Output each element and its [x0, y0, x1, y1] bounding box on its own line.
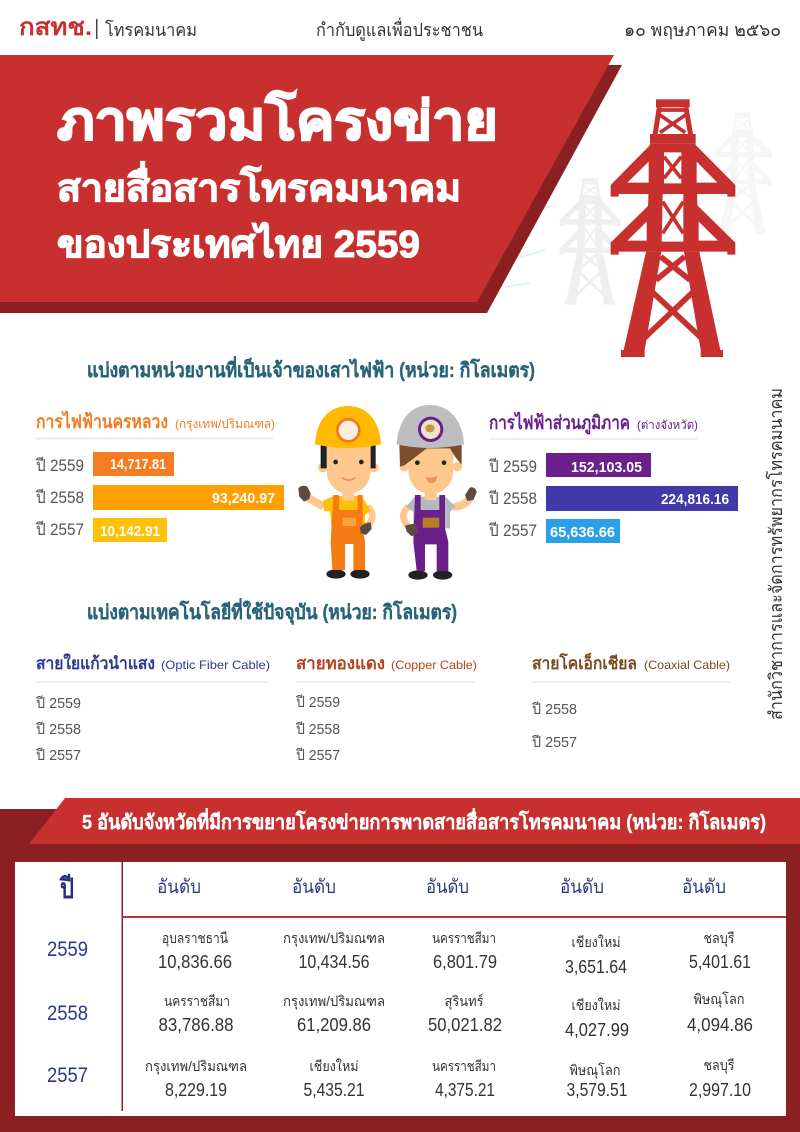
table: 2557: [47, 1064, 88, 1087]
panel: optic fiber: ปี 2558: [35, 721, 81, 738]
table: อุบลราชธานี: [162, 930, 228, 947]
bar chart: MEA: [93, 452, 284, 542]
table: สุรินทร์: [444, 993, 484, 1010]
panel: coaxial: [531, 651, 730, 751]
icon: background pylon left: [560, 178, 621, 305]
table: อันดับ: [426, 877, 469, 898]
source: vertical credit: สำนักวิชาการและจัดการทรัพยากรโทรคมนาคม: [765, 388, 786, 720]
panel: MEA: ปี 2558: [35, 488, 84, 507]
panel: optic fiber: ปี 2557: [35, 747, 81, 764]
table: เชียงใหม่: [310, 1058, 358, 1074]
panel: copper: [295, 654, 477, 764]
panel: optic fiber: (Optic Fiber Cable): [161, 658, 270, 672]
heading: by technology: แบ่งตามเทคโนโลยีที่ใช้ปัจจุบัน (หน่วย: กิโลเมตร): [87, 597, 457, 625]
table: ชลบุรี: [704, 1057, 735, 1074]
table: 50,021.82: [428, 1015, 502, 1035]
illustration: workers: [298, 405, 477, 580]
panel: optic fiber: สายใยแก้วนำแสง: [36, 653, 155, 673]
icon: light streaks: [505, 205, 553, 287]
panel: coaxial: ปี 2557: [531, 734, 577, 751]
heading: by pole owner: แบ่งตามหน่วยงานที่เป็นเจ้าของเสาไฟฟ้า (หน่วย: กิโลเมตร): [87, 355, 535, 382]
table: 10,434.56: [298, 952, 370, 972]
panel: copper: ปี 2559: [295, 694, 340, 711]
bar chart: MEA: 10,142.91: [100, 523, 160, 540]
table: 2559: [47, 938, 88, 961]
table: กรุงเทพ/ปริมณฑล: [283, 993, 385, 1010]
table: ชลบุรี: [704, 930, 735, 947]
table: เชียงใหม่: [572, 934, 620, 950]
title: ของประเทศไทย 2559: [57, 222, 420, 266]
icon: purple worker: [397, 405, 477, 580]
icon: background pylon right: [713, 113, 772, 234]
icon: orange worker: [298, 406, 381, 579]
table: นครราชสีมา: [432, 930, 496, 946]
panel: PEA: การไฟฟ้าส่วนภูมิภาค: [489, 411, 630, 435]
panel: copper: สายทองแดง: [296, 654, 385, 673]
panel: PEA: [488, 411, 738, 543]
table: พิษณุโลก: [694, 991, 744, 1008]
table: อันดับ: [157, 877, 201, 898]
panel: top five provinces: [0, 798, 800, 1132]
panel: coaxial: (Coaxial Cable): [644, 658, 730, 672]
slogan: กำกับดูแลเพื่อประชาชน: [316, 17, 483, 41]
logo: กสทช.: [19, 14, 92, 41]
table: พิษณุโลก: [570, 1062, 620, 1079]
table: อันดับ: [292, 877, 336, 898]
table: 8,229.19: [165, 1080, 227, 1100]
table: 3,651.64: [565, 957, 627, 977]
bar chart: PEA: 224,816.16: [661, 491, 729, 508]
table: 10,836.66: [158, 952, 232, 972]
table: 6,801.79: [433, 952, 497, 972]
panel: PEA: ปี 2557: [488, 521, 537, 540]
panel: copper: (Copper Cable): [391, 658, 477, 672]
panel: MEA: ปี 2557: [35, 520, 84, 539]
panel: optic fiber: [35, 653, 270, 764]
icon: main pylon: [611, 99, 735, 357]
panel: optic fiber: ปี 2559: [35, 695, 81, 712]
table: อันดับ: [560, 877, 604, 898]
logo: [19, 14, 197, 41]
panel: copper: ปี 2558: [295, 721, 340, 738]
heading band: [29, 798, 800, 844]
panel: copper: ปี 2557: [295, 747, 340, 764]
banner: [0, 55, 622, 313]
bar chart: PEA: 65,636.66: [550, 524, 615, 541]
table: นครราชสีมา: [432, 1058, 496, 1074]
table: 3,579.51: [566, 1080, 628, 1100]
title: ภาพรวมโครงข่าย: [57, 90, 498, 151]
date: ๑๐ พฤษภาคม ๒๕๖๐: [624, 20, 781, 40]
table: นครราชสีมา: [164, 993, 230, 1009]
table: 4,027.99: [565, 1020, 629, 1040]
table: 83,786.88: [158, 1015, 234, 1035]
table: 5,401.61: [689, 952, 751, 972]
panel: MEA: การไฟฟ้านครหลวง: [36, 410, 168, 433]
table: 5,435.21: [304, 1080, 364, 1100]
table: 61,209.86: [297, 1015, 371, 1035]
bar chart: PEA: [546, 453, 738, 543]
bar chart: PEA: 152,103.05: [571, 459, 642, 476]
panel: MEA: ปี 2559: [35, 456, 84, 475]
title: สายสื่อสารโทรคมนาคม: [57, 161, 461, 210]
bar chart: MEA: 14,717.81: [110, 456, 166, 473]
table: กรุงเทพ/ปริมณฑล: [283, 930, 385, 947]
panel: MEA: (กรุงเทพ/ปริมณฑล): [175, 417, 275, 432]
bar chart: MEA: 93,240.97: [212, 490, 275, 507]
logo: โทรคมนาคม: [105, 19, 197, 40]
table: 4,375.21: [435, 1080, 495, 1100]
table: 2,997.10: [689, 1080, 751, 1100]
table: 2558: [47, 1002, 88, 1025]
panel: PEA: ปี 2558: [488, 489, 537, 508]
table: อันดับ: [682, 877, 726, 898]
panel: PEA: (ต่างจังหวัด): [637, 418, 698, 432]
panel: MEA: [35, 410, 284, 542]
table: กรุงเทพ/ปริมณฑล: [145, 1058, 247, 1075]
table: 4,094.86: [687, 1015, 753, 1035]
table: ปี: [58, 873, 74, 904]
panel: PEA: ปี 2559: [488, 457, 537, 476]
panel: coaxial: สายโคเอ็กเชียล: [532, 651, 637, 673]
title: [57, 90, 498, 266]
table: เชียงใหม่: [572, 997, 620, 1013]
table: [15, 862, 786, 1116]
panel: coaxial: ปี 2558: [531, 701, 577, 718]
